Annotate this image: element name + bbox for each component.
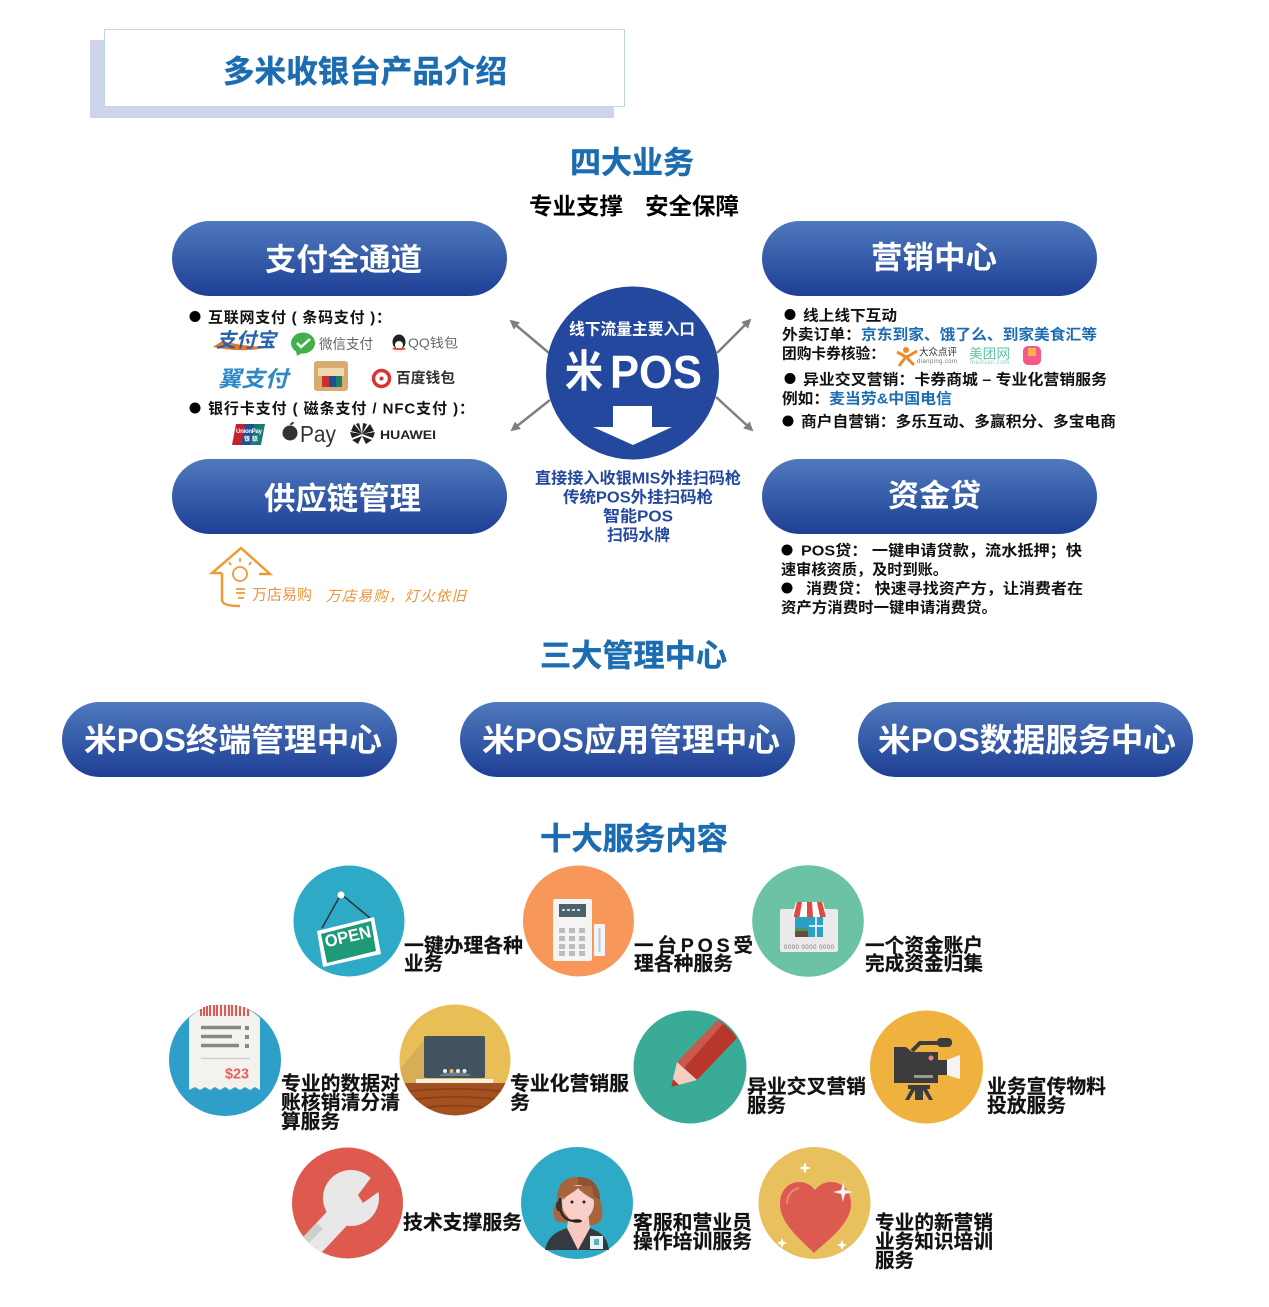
- panel: loan details: 资产方消费时一键申请消费贷。: [781, 598, 997, 616]
- pill: marketing center: 营销中心: [871, 240, 997, 276]
- service 1: open sign: OPEN: [323, 922, 373, 951]
- pill: data service: 米POS数据服务中心: [878, 722, 1176, 758]
- panel: marketing details: [782, 306, 1116, 430]
- logo: unionpay card app: [314, 361, 348, 391]
- label: 专业的新营销: [875, 1212, 993, 1234]
- text: entry methods: [535, 468, 741, 544]
- logo: nuomi: [1023, 346, 1041, 365]
- subheading: 专业支撑: [529, 193, 623, 219]
- panel: marketing details: 京东到家、饿了么、到家美食汇等: [861, 326, 1097, 344]
- service 4: receipt: $23: [225, 1066, 249, 1082]
- panel: payment methods: 互联网支付 ( 条码支付 )：: [208, 310, 391, 326]
- panel: loan details: 消费贷： 快速寻找资产方，让消费者在: [806, 580, 1083, 598]
- subheading: 安全保障: [645, 193, 739, 219]
- logo: huawei: HUAWEI: [380, 430, 436, 442]
- arrow: upper left: [511, 321, 549, 353]
- label: 业务宣传物料: [987, 1076, 1106, 1098]
- label: 客服和营业员: [633, 1211, 752, 1234]
- panel: marketing details: 商户自营销：多乐互动、多赢积分、多宝电商: [801, 412, 1116, 430]
- pill: terminal management: 米POS终端管理中心: [84, 722, 382, 758]
- label: 技术支撑服务: [403, 1212, 522, 1234]
- service 10: heart: [758, 1147, 870, 1259]
- label: [633, 1211, 752, 1253]
- label: 服务: [747, 1095, 786, 1117]
- service 6: pencil: [634, 1010, 746, 1124]
- label: 业务知识培训: [875, 1230, 993, 1253]
- label: 算服务: [281, 1110, 340, 1133]
- arrow: lower left: [512, 400, 550, 430]
- label: [281, 1073, 400, 1133]
- pill: data service: [858, 702, 1193, 777]
- heading: four businesses: 四大业务: [570, 146, 694, 180]
- pill: payment channels: [172, 221, 507, 296]
- panel: loan details: [781, 542, 1083, 616]
- label: [634, 934, 753, 975]
- panel: marketing details: 线上线下互动: [803, 306, 897, 324]
- service 1: open sign: [294, 866, 404, 976]
- pill: payment channels: 支付全通道: [265, 242, 422, 278]
- panel: payment methods: [190, 310, 474, 447]
- diagram: central POS circle: 米: [565, 348, 603, 396]
- title: [90, 30, 624, 118]
- pill: supply chain: [172, 459, 507, 534]
- logo: wandian yigou: [212, 548, 468, 606]
- pill: terminal management: [62, 702, 397, 777]
- logo: baidu wallet: [374, 369, 456, 387]
- label: [875, 1212, 993, 1272]
- label: 一个资金账户: [865, 934, 983, 957]
- label: [865, 934, 983, 975]
- logo: apple pay: [282, 421, 336, 447]
- pill: marketing center: [762, 221, 1097, 296]
- panel: payment methods: 银行卡支付 ( 磁条支付 / NFC支付 )：: [208, 400, 474, 418]
- label: 一台POS受: [634, 934, 753, 957]
- text: entry methods: 智能POS: [603, 506, 673, 526]
- label: 投放服务: [987, 1095, 1066, 1117]
- service 9: support agent: [521, 1147, 633, 1259]
- arrow: lower right: [716, 397, 752, 430]
- logo: wandian yigou: 万店易购，灯火依旧: [326, 588, 468, 605]
- logo: baidu wallet: 百度钱包: [396, 369, 456, 387]
- subheading: [529, 193, 739, 219]
- diagram: central POS circle: POS: [610, 346, 702, 398]
- panel: loan details: 速审核资质，及时到账。: [781, 560, 948, 578]
- label: 理各种服务: [634, 952, 733, 975]
- logo: meituan: 美团网: [969, 346, 1010, 362]
- panel: marketing details: 团购卡券核验：: [782, 344, 885, 362]
- panel: loan details: POS贷： 一键申请贷款，流水抵押；快: [801, 542, 1082, 560]
- panel: marketing details: 麦当劳&中国电信: [829, 390, 952, 408]
- service 8: wrench: [292, 1148, 403, 1258]
- label: 专业化营销服: [510, 1073, 629, 1095]
- pill: supply chain: 供应链管理: [264, 482, 421, 516]
- logo: dianping: [897, 346, 957, 366]
- label: [747, 1075, 866, 1117]
- pill: application management: [460, 702, 795, 777]
- arrow: upper right: [717, 320, 750, 353]
- service 4: receipt: [169, 1004, 281, 1116]
- logo: wechat pay: [291, 332, 373, 356]
- logo: alipay: 支付宝: [216, 329, 279, 352]
- panel: marketing details: 异业交叉营销：卡券商城 – 专业化营销服务: [803, 370, 1107, 388]
- label: 异业交叉营销: [747, 1075, 866, 1098]
- logo: dianping: 大众点评: [919, 346, 957, 358]
- logo: qq wallet: QQ钱包: [408, 336, 458, 350]
- label: [510, 1073, 629, 1114]
- logo: bestpay: 翼支付: [218, 366, 291, 392]
- logo: wechat pay: 微信支付: [319, 336, 373, 352]
- text: entry methods: 传统POS外挂扫码枪: [563, 488, 713, 506]
- label: [404, 934, 523, 975]
- logo: meituan: meituan.com: [970, 360, 1009, 366]
- logo: dianping: dianping.com: [917, 359, 957, 365]
- label: [987, 1076, 1106, 1117]
- panel: marketing details: 例如：: [782, 390, 829, 408]
- text: entry methods: 直接接入收银MIS外挂扫码枪: [535, 468, 741, 488]
- logo: huawei: [350, 423, 436, 444]
- label: 完成资金归集: [865, 952, 983, 975]
- heading: ten services: 十大服务内容: [540, 822, 728, 856]
- logo: unionpay: UnionPay: [236, 429, 263, 435]
- logo: unionpay: [232, 424, 265, 445]
- heading: three management centers: 三大管理中心: [540, 638, 727, 674]
- logo: qq wallet: [392, 334, 458, 350]
- logo: apple pay: Pay: [300, 421, 336, 447]
- label: 专业的数据对: [281, 1073, 400, 1095]
- text: entry methods: 扫码水牌: [607, 526, 670, 544]
- label: 服务: [875, 1250, 914, 1272]
- pill: loans: 资金贷: [888, 478, 981, 514]
- pill: application management: 米POS应用管理中心: [482, 722, 780, 758]
- pill: loans: [762, 459, 1097, 534]
- label: 业务: [404, 953, 443, 975]
- service 3: merchant card: [752, 865, 864, 977]
- logo: wandian yigou: 万店易购: [252, 586, 312, 604]
- diagram: central POS circle: [511, 286, 752, 460]
- label: 账核销清分清: [281, 1091, 400, 1114]
- logo: unionpay: 银联: [244, 435, 258, 443]
- service 7: video camera: [870, 1010, 983, 1124]
- panel: marketing details: 外卖订单：: [782, 326, 861, 344]
- title: 多米收银台产品介绍: [223, 54, 507, 90]
- service 3: merchant card: 0000 0000 0000: [784, 945, 835, 951]
- service 2: POS terminal: [523, 866, 634, 976]
- label: 务: [510, 1092, 530, 1114]
- service 5: presentation laptop: [399, 1004, 511, 1117]
- diagram: central POS circle: 线下流量主要入口: [569, 320, 695, 338]
- label: 操作培训服务: [633, 1230, 752, 1253]
- label: 一键办理各种: [404, 934, 523, 957]
